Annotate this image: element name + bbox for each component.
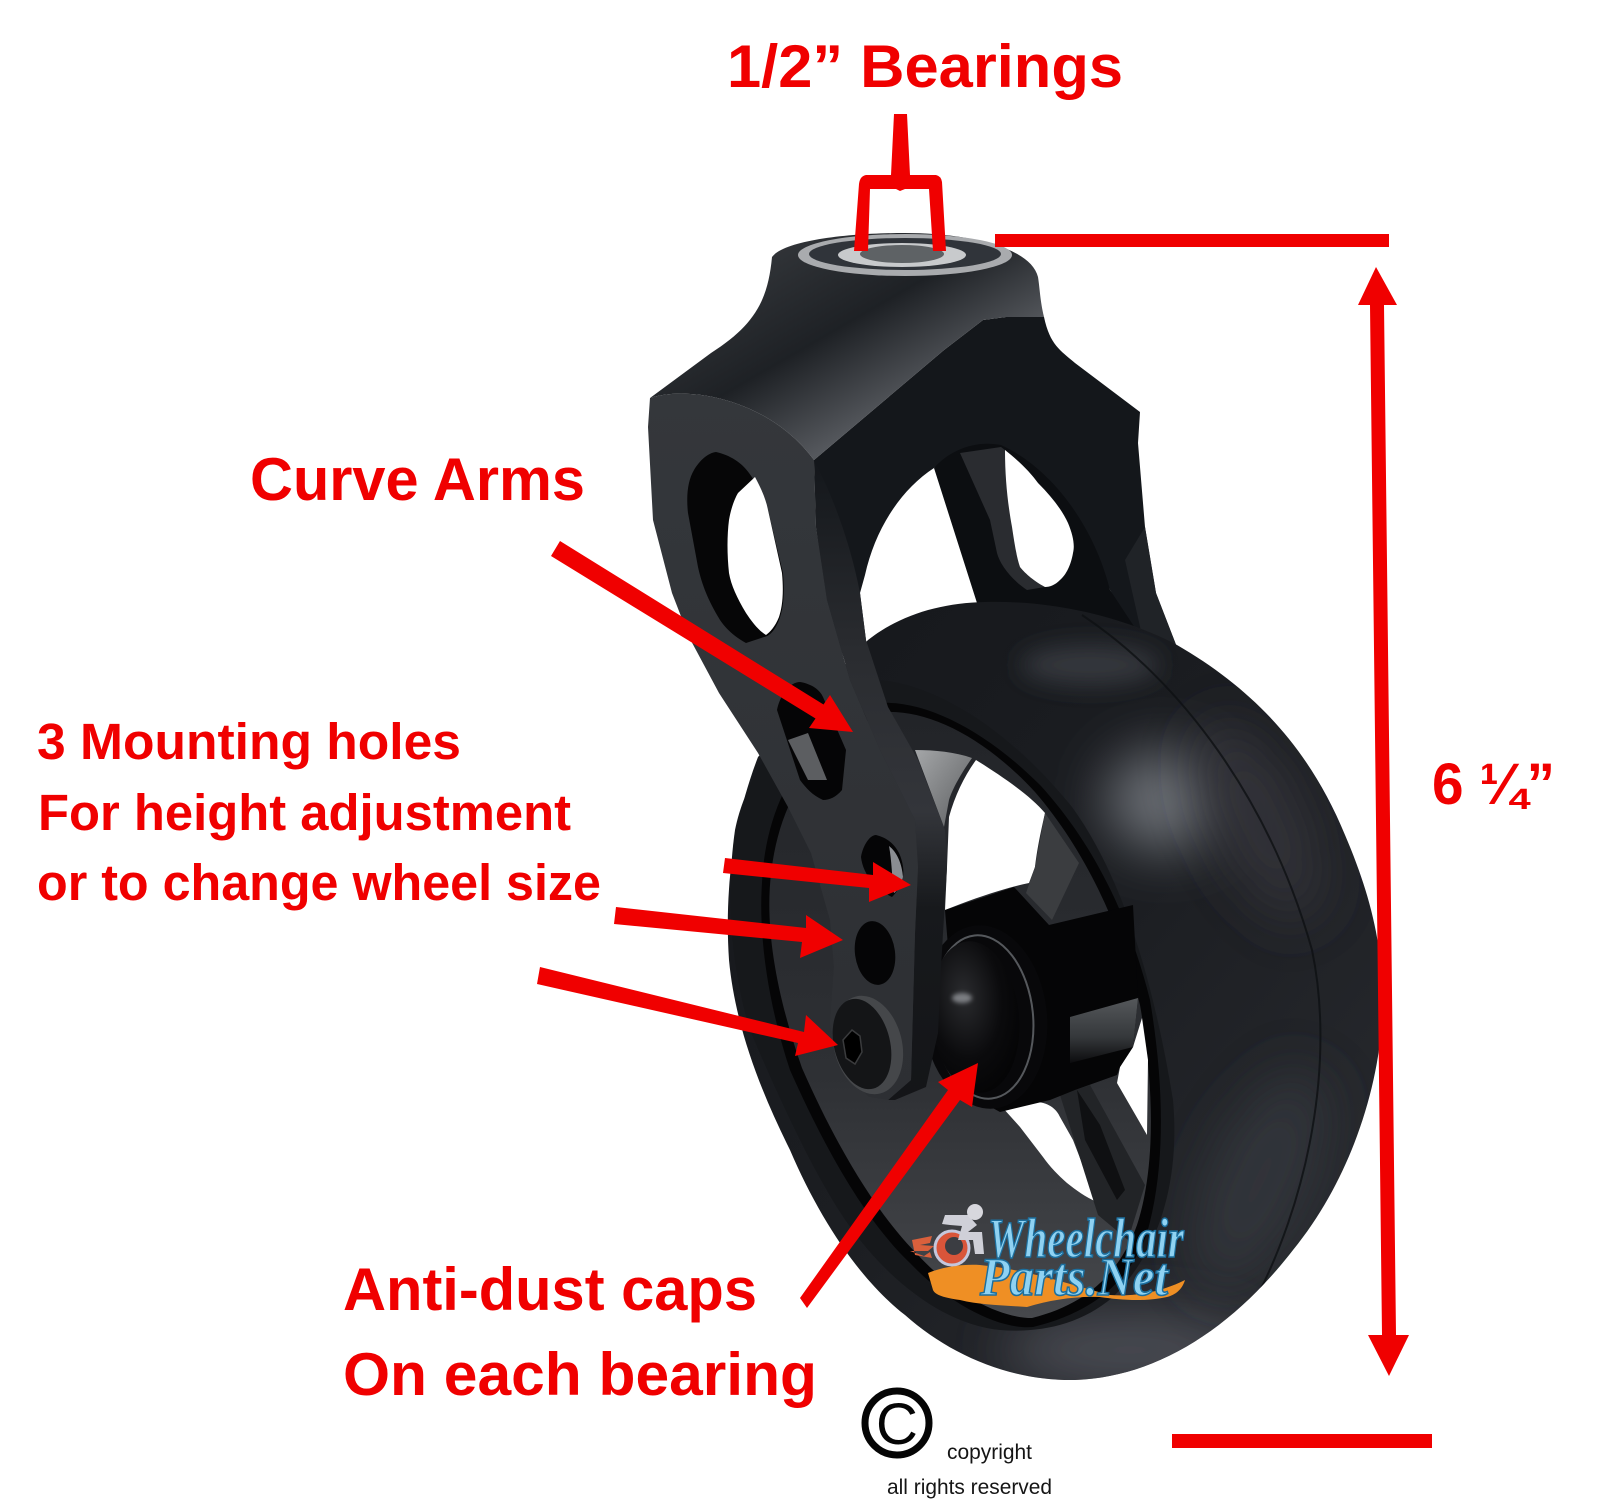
bearing outer ring [798, 234, 1012, 276]
letter C: C [876, 1392, 918, 1457]
bolt head [823, 988, 913, 1102]
fork rear parts behind the wheel [814, 317, 1180, 693]
arrow: mounting hole 2 [614, 907, 843, 958]
bearing inner ring [838, 243, 966, 267]
logo word Parts.Net: Parts.Net [979, 1247, 1170, 1307]
height dimension bottom line [1172, 1434, 1432, 1448]
hole 2 inner wall [889, 846, 903, 893]
white window right [1117, 1018, 1148, 1135]
label: anti-dust caps [343, 1256, 817, 1408]
mounting bolt [823, 988, 913, 1102]
hub flange [914, 919, 1056, 1115]
cap highlight [952, 993, 972, 1003]
wheelchair wheel center [945, 1237, 963, 1255]
bearing bore [860, 245, 944, 263]
dome [650, 233, 1044, 460]
rim gray face [769, 712, 1151, 1318]
copyright symbol [865, 1391, 929, 1457]
line 1: Anti-dust caps [343, 1256, 757, 1323]
logo: WheelchairParts.Net [910, 1204, 1185, 1307]
left front plate [648, 394, 918, 1100]
arrow: mounting hole 3 [537, 967, 838, 1056]
tire highlights [1000, 615, 1356, 1386]
arrow: anti-dust caps [800, 1063, 978, 1308]
hub barrel [945, 887, 1138, 1112]
axle highlight [1070, 998, 1138, 1063]
right arm outer edge [1125, 527, 1180, 655]
fork bevel edge [814, 460, 947, 1100]
wheel [728, 602, 1383, 1386]
bolt face [824, 993, 900, 1095]
spoke lower [1060, 1085, 1145, 1240]
hole 1 interior [788, 733, 827, 780]
circle [865, 1391, 929, 1455]
hex socket [843, 1030, 862, 1064]
wheelchair rider head [967, 1204, 983, 1220]
height dimension top line [995, 234, 1389, 247]
line 2: On each bearing [343, 1341, 817, 1408]
line 2: For height adjustment [38, 784, 571, 841]
upper left hole [687, 452, 784, 643]
spoke top right [1026, 813, 1079, 920]
caster fork front [648, 233, 1044, 1102]
bracket: bearing width [854, 114, 946, 251]
wheelchair rider body [942, 1215, 984, 1254]
rim outer ring [730, 680, 1174, 1331]
mounting hole 1 [777, 682, 846, 800]
tire silhouette [728, 602, 1383, 1380]
white window top [945, 760, 1045, 910]
arrow: vertical height dimension [1358, 267, 1409, 1376]
wheelchair wheel [935, 1231, 969, 1265]
spoke top left [915, 750, 972, 827]
orange swoosh [928, 1265, 1185, 1307]
white window below hub [1002, 1102, 1097, 1202]
speed lines [910, 1236, 934, 1258]
mounting hole 3 [851, 919, 899, 987]
right plate [814, 317, 1180, 693]
mounting hole 2 [861, 835, 903, 897]
upper left hole opening [728, 477, 783, 635]
flange ring [925, 930, 1041, 1104]
rear arm [934, 440, 1150, 640]
label: height: 6 ¼” [1432, 752, 1555, 817]
rim groove [761, 703, 1161, 1327]
copyright text: copyright [947, 1441, 1032, 1464]
logo word Wheelchair: Wheelchair [988, 1208, 1185, 1270]
arrow: curve arms [551, 541, 853, 732]
rights text: all rights reserved [887, 1476, 1052, 1499]
bearing black seal [809, 238, 1001, 270]
anti-dust cap [923, 937, 1027, 1097]
label: mounting holes [37, 713, 601, 911]
arrow: mounting hole 1 [723, 858, 911, 902]
rear arm bevel [960, 447, 1045, 590]
line 1: 3 Mounting holes [37, 713, 461, 770]
label: curve arms: Curve Arms [250, 446, 585, 513]
rear arm teardrop hole [1005, 450, 1074, 587]
line 3: or to change wheel size [37, 854, 601, 911]
title: 1/2 inch bearings: 1/2” Bearings [727, 33, 1123, 100]
